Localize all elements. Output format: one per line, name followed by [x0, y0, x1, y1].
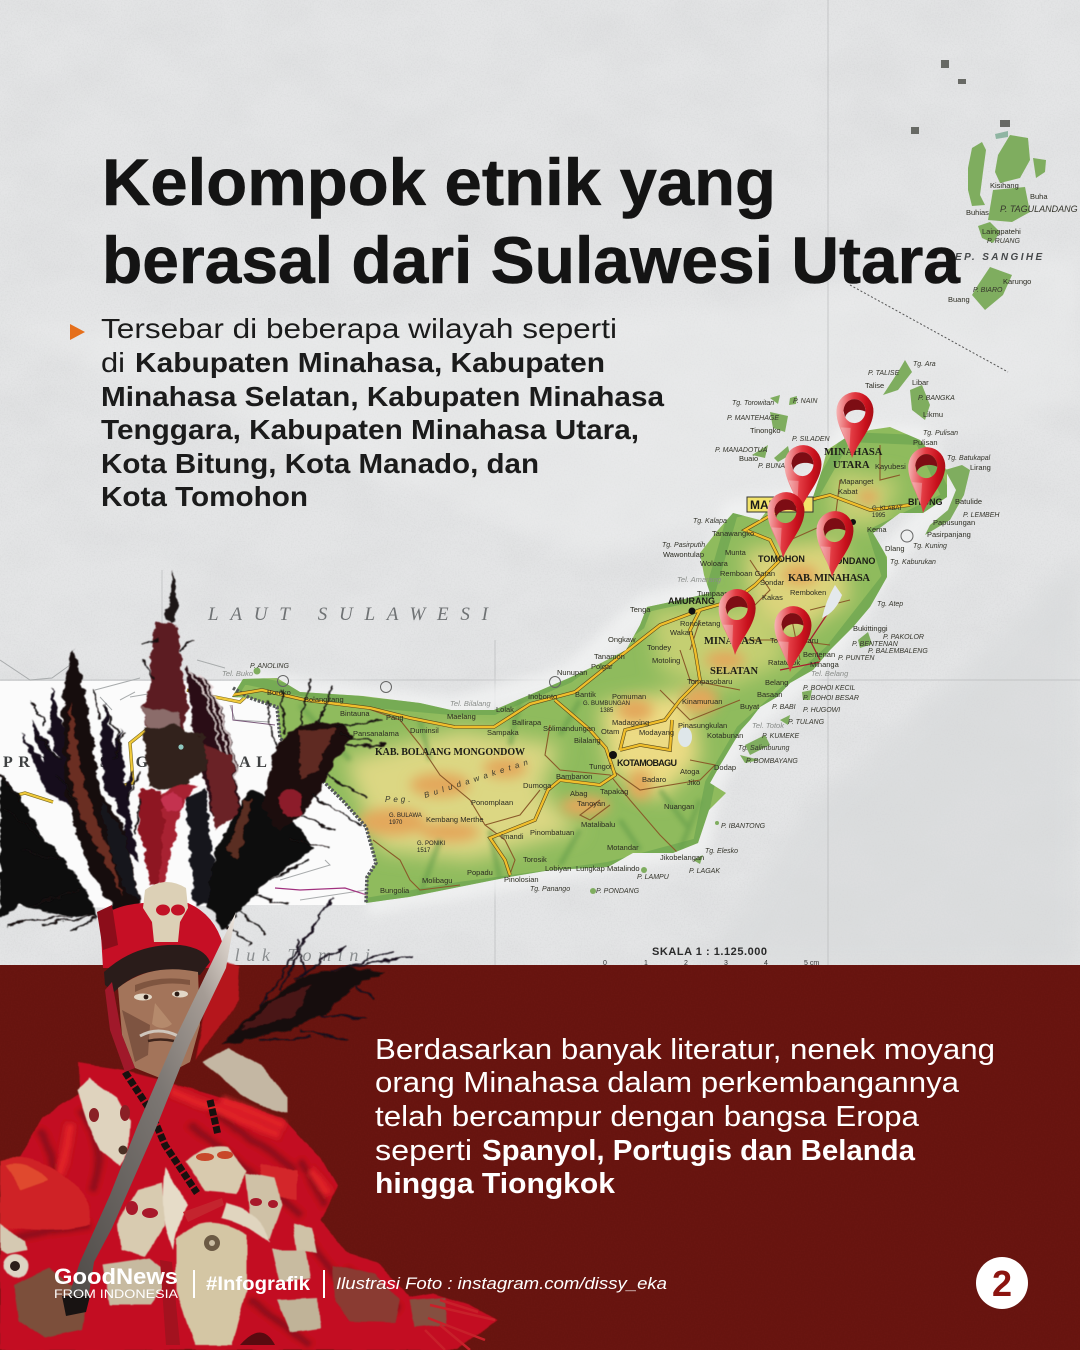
map: place names: Ballirapa	[512, 718, 542, 727]
map: place names: KOTAMOBAGU	[617, 758, 677, 768]
map: place names: Kema	[867, 525, 887, 534]
map: place names: Abag	[570, 789, 588, 798]
feather barbs	[0, 640, 385, 945]
map: place names: Pang	[386, 713, 404, 722]
map: place names: Kabat	[838, 487, 859, 496]
map: place names: Bantik	[575, 690, 596, 699]
gulf name: Teluk Tomini	[205, 945, 370, 965]
explanatory text: seperti	[375, 1135, 472, 1167]
map: place names: 1970	[389, 820, 403, 826]
explanatory text: orang Minahasa dalam perkembangannya	[375, 1067, 960, 1099]
map: place names: P. TAGULANDANG	[1000, 204, 1078, 214]
scale bar: 3	[724, 960, 728, 967]
bird eye	[178, 744, 184, 750]
map: place names: Jikobelangan	[660, 853, 704, 862]
map: place names: BITUNG	[908, 497, 942, 507]
intro text: di	[101, 347, 125, 378]
map: place names: Lobiyan	[545, 864, 571, 873]
map: offshore islands	[254, 131, 1046, 894]
scale bar: 4	[764, 960, 768, 967]
map: place names: Kotabunan	[707, 731, 743, 740]
map labels: regencies: SELATAN	[710, 666, 758, 677]
map: place names: Tondey	[647, 643, 671, 652]
map: place names: Solimandungan	[543, 724, 595, 733]
map: place names: Remboken	[790, 588, 826, 597]
map: place names: Tumpaan	[697, 589, 728, 598]
map: place names: Belang	[765, 678, 788, 687]
map: place names: Polgar	[591, 662, 613, 671]
sea name: LAUT SULAWESI	[207, 604, 490, 625]
map: place names: P. BALEMBALENG	[868, 648, 928, 655]
explanatory text: telah bercampur dengan bangsa Eropa	[375, 1101, 920, 1133]
map: place names: Munta	[725, 548, 747, 557]
map: place names: Ongkaw	[608, 635, 636, 644]
intro text: Tersebar di beberapa wilayah seperti	[101, 313, 617, 344]
map: place names: Torosik	[523, 855, 547, 864]
map: place names: Tg. Batukapal	[947, 455, 991, 462]
map: place names: Atoga	[680, 767, 700, 776]
map background: sea	[0, 0, 1080, 970]
map: place names: Ponomplaan	[471, 798, 513, 807]
map: place names: Duminsil	[410, 726, 439, 735]
map: place names: P. TALISE	[868, 370, 900, 377]
map: place names: Motandar	[607, 843, 639, 852]
map: place names: Kisihang	[990, 181, 1019, 190]
map: place names: G. KLABAT	[872, 506, 903, 512]
map: place names: TONDANO	[830, 556, 875, 566]
map: place names: Kembang Merthe	[426, 815, 484, 824]
map: place names: Pinombatuan	[530, 828, 574, 837]
map: place names: Nunupan	[557, 668, 587, 677]
map: place names: P. BANGKA	[918, 395, 955, 402]
map: place names: Lolak	[496, 705, 514, 714]
feather headdress	[0, 570, 352, 930]
footer logo and credits: #Infografik	[206, 1274, 310, 1295]
explanatory text: Berdasarkan banyak literatur, nenek moyang	[375, 1034, 995, 1066]
map labels: regencies: MINAHASA	[824, 447, 883, 458]
map: place names: Tg. Atep	[877, 601, 903, 608]
map: place names: Tg. Pasirputih	[662, 542, 705, 549]
map: place names	[3, 181, 1078, 967]
scale bar	[603, 946, 819, 967]
map: place names: Tinongko	[750, 426, 781, 435]
map: place names: Likmu	[923, 410, 943, 419]
lower-right feathers	[222, 897, 413, 1045]
map: place names: Bambanon	[556, 772, 592, 781]
map: place names: P. RUANG	[987, 238, 1020, 245]
title	[102, 145, 961, 297]
map: place names: Buyat	[740, 702, 760, 711]
map: place names: Molibagu	[422, 876, 452, 885]
map: place names: 1385	[600, 708, 614, 714]
map: place names: Pulisan	[913, 438, 938, 447]
intro text: Kota Bitung, Kota Manado, dan	[101, 448, 539, 479]
map: place names: Tg. Kaburukan	[890, 559, 936, 566]
map: place names: Lungkap	[576, 864, 605, 873]
footer logo and credits: FROM INDONESIA	[54, 1287, 178, 1301]
map: place names: P. BIARO	[973, 287, 1003, 294]
map: place names: 1995	[872, 513, 886, 519]
map: place names: Buhias	[966, 208, 989, 217]
explanatory text	[375, 1034, 995, 1200]
map: place names: G. PONIKI	[417, 841, 446, 847]
title: berasal dari Sulawesi Utara	[102, 223, 961, 297]
map: place names: Karungo	[1003, 277, 1031, 286]
map: place names: Kakas	[762, 593, 783, 602]
map: Gorontalo province in white	[0, 660, 376, 908]
province name: PROVINSI GORONTALO	[3, 754, 285, 771]
map: place names: Pansanalama	[353, 729, 400, 738]
map: place names: EP. SANGIHE	[955, 252, 1045, 263]
map: place names: Remboan Gatan	[720, 569, 775, 578]
scale bar: 1	[644, 960, 648, 967]
map: place names: P. BOHOI BESAR	[803, 695, 859, 702]
map: place names: Lirang	[970, 463, 991, 472]
title: Kelompok etnik yang	[102, 145, 776, 219]
map: place names: Tg. Panango	[530, 886, 570, 893]
map: place names: P. IBANTONG	[721, 823, 766, 830]
map: place names: Matalibalu	[581, 820, 615, 829]
map: place names: Pinasungkulan	[678, 721, 727, 730]
map: place names: P. MANADOTUA	[715, 447, 768, 454]
map: place names: Tungoi	[589, 762, 612, 771]
map: place names: Tanamon	[594, 652, 625, 661]
red coat	[0, 1063, 497, 1350]
intro text: Minahasa Selatan, Kabupaten Minahasa	[101, 381, 665, 412]
map: place names: Tanoyan	[577, 799, 605, 808]
map: place names: Tel. Totok	[752, 721, 785, 730]
map: place names: P. BENTENAN	[852, 641, 899, 648]
explanatory text: Spanyol, Portugis dan Belanda	[482, 1135, 916, 1167]
map: place names: Tel. Amarang	[677, 575, 722, 584]
map: place names: Dumoga	[523, 781, 552, 790]
map: place names: Kinamuruan	[682, 697, 722, 706]
footer logo and credits: GoodNews	[54, 1264, 178, 1289]
map: place names: Tel. Bilalang	[450, 699, 491, 708]
map: place names: Buaio	[739, 454, 758, 463]
map: place names: Tg. Ara	[913, 361, 936, 368]
map: place names: P. LAMPU	[637, 874, 670, 881]
map: place names: P. BOMBAYANG	[746, 758, 798, 765]
map: place names: Bolangitang	[304, 695, 344, 704]
map: place names: P. ANOLING	[250, 663, 289, 670]
map: place names: Buha	[1030, 192, 1048, 201]
map: sea halo around peninsula	[248, 437, 947, 903]
map: place names: Wawontulap	[663, 550, 704, 559]
map: place names: P. PAKOLOR	[883, 634, 924, 641]
map labels: regencies: KAB. MINAHASA	[788, 573, 870, 584]
map: place names: Bentenan	[803, 650, 835, 659]
map: place names: Tenga	[630, 605, 651, 614]
map: place names: P. MANTEHAGE	[727, 415, 779, 422]
map: place names: Dlang	[885, 544, 905, 553]
footer logo and credits	[54, 1264, 667, 1301]
map: place names: P. SILADEN	[792, 436, 831, 443]
map labels: regencies: KAB. BOLAANG MONGONDOW	[375, 747, 525, 758]
explanatory text: hingga Tiongkok	[375, 1168, 616, 1200]
map: place names: P. KUMEKE	[762, 733, 800, 740]
map: place names: P. PUNTEN	[838, 655, 875, 662]
map: place names: Bintauna	[340, 709, 370, 718]
map: place names: Batulide	[955, 497, 982, 506]
map: place names: P. LAGAK	[689, 868, 720, 875]
sword	[62, 912, 236, 1316]
map: place names: Badaro	[642, 775, 666, 784]
map: place names: Tanawangko	[712, 529, 754, 538]
map: place names: Boroko	[267, 688, 291, 697]
map labels: regencies	[375, 447, 883, 758]
map: North Sulawesi peninsula terrain	[232, 427, 947, 903]
map: place names: Bungolia	[380, 886, 410, 895]
map: place names: Sampaka	[487, 728, 520, 737]
map: place names: Libar	[912, 378, 929, 387]
map: place names: P. TULANG	[788, 719, 825, 726]
map: place names: Tg. Pulisan	[923, 430, 958, 437]
map: place names: Buludawaketan	[423, 756, 533, 800]
skull details	[10, 1105, 278, 1345]
map: place names: Motoling	[652, 656, 680, 665]
intro text	[101, 313, 665, 512]
map: place names: Tg. Salimburung	[738, 745, 789, 752]
map: place names: Inobonto	[528, 692, 557, 701]
map labels: regencies: UTARA	[833, 460, 870, 471]
map: place names: Tg. Kalapa	[693, 518, 727, 525]
map: place names: Pasirpanjang	[927, 530, 971, 539]
map: place names: Nuangan	[664, 802, 694, 811]
map: place names: Tg. Kuning	[913, 543, 947, 550]
map: place names: Popadu	[467, 868, 493, 877]
map: place names: P. BUNA	[758, 463, 785, 470]
map: place names: Kayubesi	[875, 462, 906, 471]
map: place names: Tel. Buko	[222, 669, 253, 678]
map: place names: Buang	[948, 295, 970, 304]
map: place names: P. BOHOI KECIL	[803, 685, 855, 692]
map: place names: Modayang	[639, 728, 674, 737]
map: tiny black specks of northern islets	[911, 60, 1010, 134]
map: place names: Matalindo	[607, 864, 640, 873]
necklace	[125, 1072, 218, 1193]
map: place names: Wakan	[670, 628, 693, 637]
map: place names: Maelang	[447, 712, 476, 721]
map: place names: Woloara	[700, 559, 729, 568]
map: place names: P. PONDANG	[596, 888, 640, 895]
map: place names: Bukittinggi	[853, 624, 888, 633]
page number badge: 2	[992, 1263, 1012, 1304]
map: place names: Talise	[865, 381, 884, 390]
map: place names: Tg. Torowitan	[732, 400, 774, 407]
map: place names: G. BULAWA	[389, 813, 422, 819]
map: place names: Tompasobaru	[687, 677, 732, 686]
map: place names: Laingpatehi	[982, 227, 1021, 236]
map: place names: Tompaso Baru	[770, 636, 818, 645]
intro text: Kabupaten Minahasa, Kabupaten	[135, 347, 605, 378]
map: place names: P. BABI	[772, 704, 796, 711]
map: place names: P. HUGOWI	[803, 707, 840, 714]
scarf red scraps	[195, 960, 240, 1060]
map: place names: Pomuman	[612, 692, 646, 701]
map: place names: Madagoing	[612, 718, 649, 727]
map: place names: AMURANG	[668, 596, 715, 606]
red tassels	[425, 1300, 495, 1350]
face	[105, 969, 200, 1078]
map: place names: Sondar	[760, 578, 785, 587]
map: place names: Pinolosian	[504, 875, 539, 884]
page number badge	[976, 1257, 1028, 1309]
intro text: Tenggara, Kabupaten Minahasa Utara,	[101, 414, 639, 445]
map labels: regencies: MINAHASA	[704, 636, 763, 647]
skulls and tusks	[0, 1047, 320, 1345]
map: place names: P. LEMBEH	[963, 512, 1000, 519]
map: place names: Peg.	[385, 795, 413, 804]
map: place names: Papusungan	[933, 518, 975, 527]
bottom maroon panel	[0, 965, 1080, 1350]
map: place names: Imandi	[501, 832, 524, 841]
footer logo and credits: Ilustrasi Foto : instagram.com/dissy_eka	[336, 1274, 667, 1293]
map: place names: Minanga	[810, 660, 840, 669]
map: place names: Jiko	[687, 778, 700, 787]
map: place names: MANADO	[750, 498, 804, 512]
map: place names: Mapanget	[840, 477, 874, 486]
map: place names: Basaan	[757, 690, 782, 699]
map: place names: G. BUMBUNGAN	[583, 701, 630, 707]
map: place names: 1517	[417, 848, 431, 854]
map: place names: Ronoketang	[680, 619, 720, 628]
map: place names: Bilalang	[574, 736, 601, 745]
scale bar: 2	[684, 960, 688, 967]
location pins	[717, 391, 947, 673]
map: place names: TOMOHON	[758, 554, 805, 564]
map: place names: Tg. Elesko	[705, 848, 738, 855]
intro text: Kota Tomohon	[101, 481, 308, 512]
map: place names: Tel. Belang	[811, 669, 849, 678]
map: place names: P. NAIN	[793, 398, 818, 405]
icon: orange arrow bullet	[70, 324, 85, 340]
map: place names: Dodap	[714, 763, 736, 772]
scale bar: 0	[603, 960, 607, 967]
map: place names: Tapakag	[600, 787, 628, 796]
scale bar: 5 cm	[804, 960, 819, 967]
illustration: Minahasa warrior	[0, 570, 497, 1350]
hat	[97, 882, 223, 992]
map: place names: Otam	[601, 727, 619, 736]
hands	[13, 1265, 447, 1338]
scale bar: SKALA 1 : 1.125.000	[652, 946, 767, 958]
map: place names: Ratatotok	[768, 658, 800, 667]
